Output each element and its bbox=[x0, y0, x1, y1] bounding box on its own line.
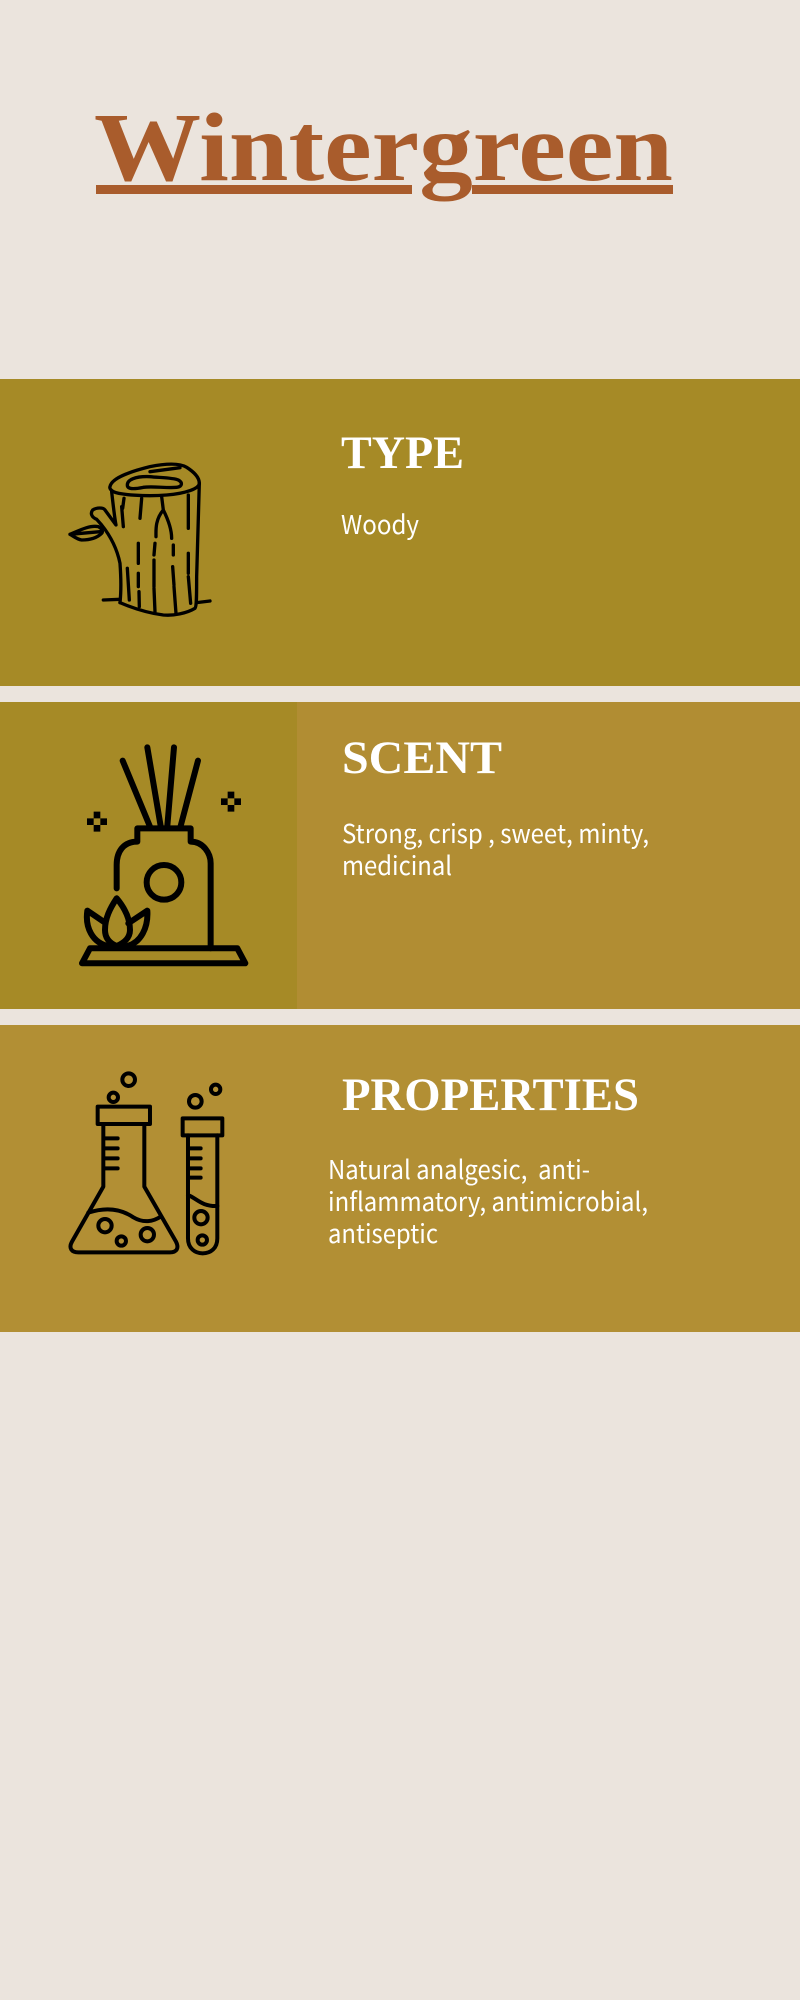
text: properties: antiseptic bbox=[328, 1214, 438, 1251]
panel: properties bbox=[0, 1025, 800, 1332]
text: scent: medicinal bbox=[342, 846, 452, 883]
text: properties: Natural analgesic, anti- bbox=[328, 1150, 590, 1187]
text: scent: Strong, crisp , sweet, minty, bbox=[342, 814, 649, 851]
heading: scent: SCENT bbox=[342, 732, 502, 784]
heading: type: TYPE bbox=[341, 427, 464, 479]
panel: scent bbox=[0, 702, 800, 1009]
icon: reed diffuser bbox=[82, 747, 245, 963]
panel: type bbox=[0, 379, 800, 686]
text: properties: inflammatory, antimicrobial, bbox=[328, 1182, 648, 1219]
heading: properties: PROPERTIES bbox=[342, 1069, 639, 1121]
text: type: Woody bbox=[341, 505, 419, 542]
title: Wintergreen bbox=[94, 94, 673, 202]
icon: tree stump bbox=[70, 464, 210, 615]
icon: flask and test tube bbox=[70, 1073, 222, 1253]
